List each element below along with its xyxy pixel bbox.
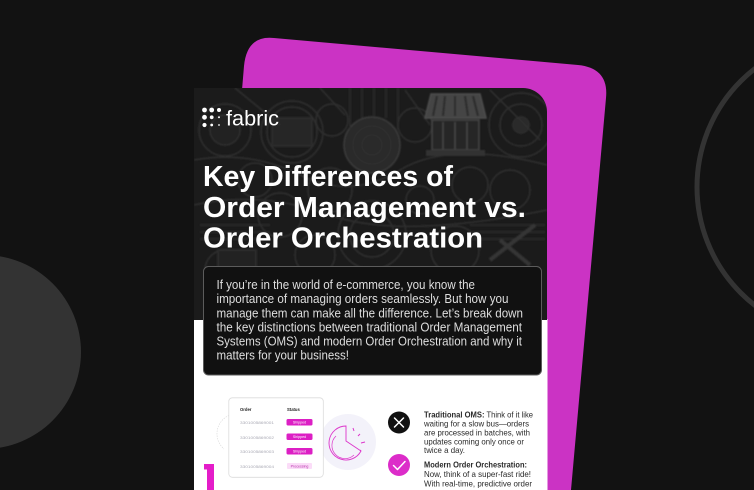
- status pills: Shipped: [293, 450, 306, 454]
- order numbers: 3301005869001: [240, 420, 275, 425]
- hero texture image: [194, 88, 553, 320]
- section number 1: [204, 464, 214, 490]
- order numbers: [240, 420, 275, 469]
- table header: Order: [240, 407, 252, 412]
- traditional OMS text: twice a day.: [424, 445, 465, 455]
- clock icon: [320, 414, 376, 470]
- white card body: [194, 319, 548, 490]
- clock glyph: [329, 426, 365, 460]
- storefront illustration: [425, 94, 486, 156]
- modern order orchestration text: With real-time, predictive order: [424, 478, 532, 488]
- icon: cross: [388, 412, 410, 434]
- title: Key Differences of: [203, 161, 453, 193]
- traditional OMS text: are processed in batches, with: [424, 428, 530, 438]
- intro text: importance of managing orders seamlessly. But how you: [216, 292, 509, 306]
- title: Order Management vs.: [203, 192, 526, 224]
- intro panel background: [204, 266, 542, 375]
- title: [203, 161, 526, 254]
- order numbers: 3301005869002: [240, 435, 275, 440]
- intro text: the key distinctions between traditional Order Management: [216, 320, 522, 334]
- magenta tilted backing card: [242, 38, 606, 490]
- table background: [229, 398, 323, 477]
- intro text: If you’re in the world of e-commerce, you know the: [216, 278, 475, 292]
- intro text: [216, 278, 523, 362]
- traditional OMS text: updates coming only once or: [424, 436, 524, 446]
- status pills: [286, 419, 312, 469]
- traditional OMS text: [423, 410, 533, 455]
- document card: [194, 88, 553, 490]
- fabric logo: [202, 108, 279, 130]
- decorative ring: [697, 37, 754, 337]
- title: Order Orchestration: [203, 222, 483, 254]
- order numbers: 3301005869003: [240, 449, 275, 454]
- intro text: matters for your business!: [216, 348, 349, 362]
- logo wordmark: fabric: [226, 108, 279, 130]
- status pills: Shipped: [293, 421, 306, 425]
- logo dots: [202, 108, 221, 127]
- traditional OMS text: waiting for a slow bus—orders: [423, 418, 529, 428]
- status pills: Shipped: [293, 435, 306, 439]
- order numbers: 3301005869004: [240, 464, 275, 469]
- intro panel: [204, 266, 542, 375]
- icon: check: [388, 454, 410, 476]
- clock backdrop: [320, 414, 376, 470]
- dashed decorative arc: [217, 414, 234, 449]
- intro text: Systems (OMS) and modern Order Orchestration and why it: [216, 334, 522, 348]
- table header: Status: [287, 407, 300, 412]
- table header: [240, 407, 300, 412]
- intro text: manage them can make all the difference. Let’s break down: [216, 306, 523, 320]
- modern order orchestration text: Modern Order Orchestration:: [424, 460, 527, 470]
- status pills: Processing: [291, 464, 308, 468]
- traditional OMS text: Traditional OMS: Think of it like: [424, 410, 533, 420]
- decorative grey circle: [0, 255, 81, 449]
- modern order orchestration text: [424, 460, 532, 488]
- order table card: [229, 398, 323, 477]
- modern order orchestration text: Now, think of a super-fast ride!: [424, 469, 531, 479]
